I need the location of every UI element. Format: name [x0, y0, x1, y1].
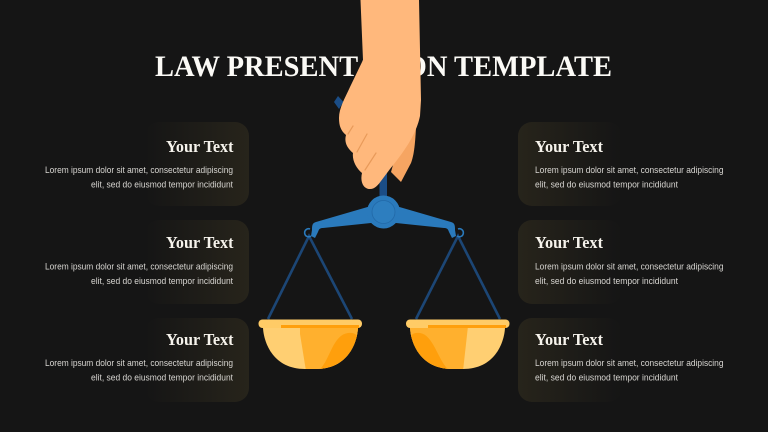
finger creases	[348, 126, 376, 170]
left pan bowl	[263, 328, 358, 369]
left pan rim	[258, 320, 362, 328]
panel: right middle	[518, 220, 724, 304]
panel: left middle	[45, 220, 249, 304]
panel: right bottom: elit, sed do eiusmod tempor incididunt	[535, 372, 678, 382]
panel: left bottom: Lorem ipsum dolor sit amet, consectetur adipiscing	[45, 358, 233, 368]
panel: right middle: Lorem ipsum dolor sit amet, consectetur adipiscing	[535, 262, 724, 272]
right pan rim	[406, 320, 510, 328]
icon: balance scale	[258, 96, 510, 371]
handle end diamond	[334, 96, 344, 109]
scale handle rod	[380, 165, 387, 200]
palm and fingers	[339, 0, 421, 189]
panel: right top	[518, 122, 724, 206]
thumb	[391, 128, 416, 182]
panel: right bottom: Lorem ipsum dolor sit amet, consectetur adipiscing	[535, 358, 724, 368]
panel: left middle: elit, sed do eiusmod tempor incididunt	[91, 276, 233, 286]
icon: hand holding scale	[339, 0, 421, 189]
left hook ring	[305, 229, 311, 237]
panel: left top: Lorem ipsum dolor sit amet, consectetur adipiscing	[45, 165, 233, 175]
panel: left top	[45, 122, 249, 206]
beam	[311, 206, 456, 238]
right hook ring	[457, 229, 463, 237]
hub	[367, 196, 400, 228]
panel: right bottom: Your Text	[535, 330, 603, 349]
panel: left middle: Your Text	[166, 233, 234, 252]
panel: right top: elit, sed do eiusmod tempor incididunt	[535, 180, 678, 190]
right strings	[416, 236, 500, 319]
panel: right bottom	[518, 318, 724, 402]
panel: left top: elit, sed do eiusmod tempor incididunt	[91, 180, 233, 190]
panel: right top: Lorem ipsum dolor sit amet, consectetur adipiscing	[535, 165, 724, 175]
panel: left bottom: Your Text	[166, 330, 234, 349]
panel: right top: Your Text	[535, 137, 603, 156]
right pan bowl	[410, 328, 505, 369]
panel: right middle: Your Text	[535, 233, 603, 252]
panel: left middle: Lorem ipsum dolor sit amet, consectetur adipiscing	[45, 262, 233, 272]
panel: right middle: elit, sed do eiusmod tempor incididunt	[535, 276, 678, 286]
panel: left bottom	[45, 318, 249, 402]
left strings	[268, 236, 352, 319]
panel: left bottom: elit, sed do eiusmod tempor incididunt	[91, 372, 233, 382]
title: LAW PRESENTATION TEMPLATE	[155, 50, 612, 83]
panel: left top: Your Text	[166, 137, 234, 156]
